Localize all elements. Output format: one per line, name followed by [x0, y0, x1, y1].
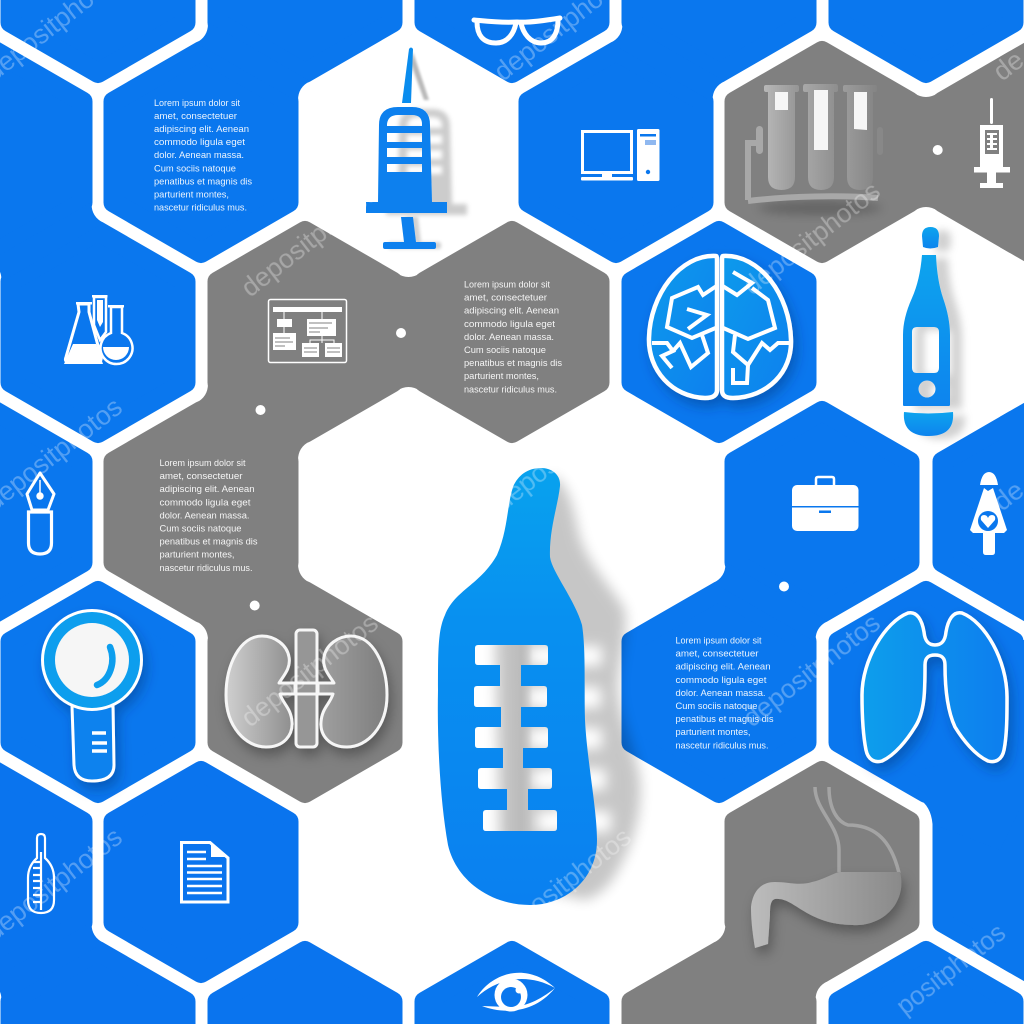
text block: blue right: nascetur ridiculus mus.: [676, 739, 768, 750]
panel: blue merged hexagons flasks: [0, 51, 186, 433]
text block: gray centre: [464, 278, 562, 394]
text block: blue right: penatibus et magnis dis: [676, 713, 774, 724]
icon: large thermometer with shadow: [438, 468, 640, 905]
icon: eye: [477, 973, 555, 1012]
icon: chart schematic: [268, 300, 346, 362]
icon: glasses: [474, 18, 560, 43]
text block: gray left: dolor. Aenean massa.: [160, 509, 250, 520]
text block: top left: adipiscing elit. Aenean: [154, 123, 249, 134]
text block: blue right: commodo ligula eget: [676, 674, 767, 685]
panel: blue hexagon woman: [942, 403, 1024, 621]
text block: blue right: [676, 634, 774, 750]
icon: blue syringe: [366, 48, 447, 249]
text block: gray centre: penatibus et magnis dis: [464, 357, 562, 368]
text block: gray centre: dolor. Aenean massa.: [464, 331, 554, 342]
panel: blue hexagon pen: [0, 411, 82, 613]
text block: blue right: parturient montes,: [676, 726, 750, 737]
text block: top left: nascetur ridiculus mus.: [154, 202, 247, 213]
text block: gray centre: Cum sociis natoque: [464, 344, 546, 355]
icon: computer: [581, 129, 660, 181]
icon: pregnant woman: [970, 472, 1007, 555]
icon: kidneys: [226, 630, 387, 747]
panel: blue hexagon eye: [414, 951, 610, 1024]
panel: blue merged hexagons small thermometer: [0, 771, 196, 1024]
icon: flasks: [64, 295, 132, 364]
watermarks: depositphotos: [235, 178, 384, 303]
icon: test tubes: [748, 84, 883, 215]
watermarks: depositphotos: [737, 608, 886, 733]
icon: briefcase: [792, 477, 858, 531]
icon: lungs: [862, 613, 1007, 762]
text block: top left: Lorem ipsum dolor sit: [154, 97, 240, 108]
panel: blue hexagon glasses: [424, 0, 600, 73]
watermarks: depositphotos: [488, 822, 637, 947]
panel: gray merged hexagons stomach: [622, 771, 910, 1024]
panel: gray merged hexagons test tubes: [734, 43, 1024, 261]
icon: stomach: [751, 787, 901, 948]
text block: gray left: amet, consectetuer: [160, 470, 242, 481]
text block: gray centre: nascetur ridiculus mus.: [464, 383, 557, 394]
text block: gray centre: Lorem ipsum dolor sit: [464, 278, 550, 290]
text block: gray left: [160, 457, 258, 573]
text block: gray centre: commodo ligula eget: [464, 318, 555, 329]
panel: blue merged hexagons briefcase and text: [632, 411, 910, 793]
panel: gray merged path with text and kidneys: [114, 231, 600, 793]
text block: gray centre: amet, consectetuer: [464, 292, 547, 303]
panel: blue hexagon brain: [632, 231, 806, 433]
watermarks: depositphotos: [235, 608, 384, 733]
text block: gray left: nascetur ridiculus mus.: [160, 562, 252, 573]
text block: gray left: commodo ligula eget: [160, 496, 251, 507]
panel: blue merged hexagons lungs: [838, 591, 1024, 981]
watermarks: positphotos: [890, 917, 1011, 1021]
panel: blue hexagon top left: [10, 0, 186, 73]
plunger: [383, 217, 436, 249]
text block: gray centre: parturient montes,: [464, 370, 539, 381]
watermarks: depositphotos: [737, 176, 886, 301]
panel: blue hexagon top right: [838, 0, 1014, 73]
panel: blue hexagon bottom right: [828, 951, 1024, 1024]
text block: top left: penatibus et magnis dis: [154, 175, 252, 186]
text block: blue right: amet, consectetuer: [676, 648, 758, 659]
text block: gray left: penatibus et magnis dis: [160, 536, 258, 547]
text block: top left: amet, consectetuer: [154, 110, 237, 121]
icon: brain: [649, 256, 791, 398]
text block: blue right: adipiscing elit. Aenean: [676, 661, 770, 672]
panel: blue merged hexagons with first text block: [114, 0, 392, 253]
icon: digital thermometer: [903, 227, 953, 436]
text block: gray left: adipiscing elit. Aenean: [160, 483, 254, 494]
watermarks: depositphotos: [488, 392, 637, 517]
text block: top left: commodo ligula eget: [154, 136, 245, 147]
panel: blue hexagon bottom: [208, 951, 402, 1024]
text block: top left: Cum sociis natoque: [154, 162, 236, 173]
text block: gray left: Cum sociis natoque: [160, 522, 242, 534]
text block: gray left: Lorem ipsum dolor sit: [160, 457, 246, 468]
panel: blue merged hexagons computer: [528, 0, 806, 253]
text block: top left: [154, 97, 252, 213]
connector dots: [250, 145, 943, 610]
needle shadow: [411, 52, 429, 100]
text block: gray left: parturient montes,: [160, 549, 234, 560]
text block: blue right: Cum sociis natoque: [676, 700, 758, 711]
text block: top left: parturient montes,: [154, 188, 229, 200]
text block: blue right: Lorem ipsum dolor sit: [676, 634, 762, 646]
icon: magnifier: [42, 610, 142, 781]
icon: small white syringe: [974, 98, 1010, 188]
panel: blue hexagon document: [114, 771, 288, 973]
icon: pen nib: [27, 473, 54, 554]
panel: blue hexagon magnifier: [10, 591, 186, 793]
icon: small thermometer outline: [28, 834, 54, 913]
needle: [402, 48, 413, 103]
barrel: [366, 107, 447, 213]
text block: gray centre: adipiscing elit. Aenean: [464, 305, 559, 316]
text block: top left: dolor. Aenean massa.: [154, 149, 244, 160]
text block: blue right: dolor. Aenean massa.: [676, 687, 766, 698]
icon: document: [182, 842, 228, 902]
